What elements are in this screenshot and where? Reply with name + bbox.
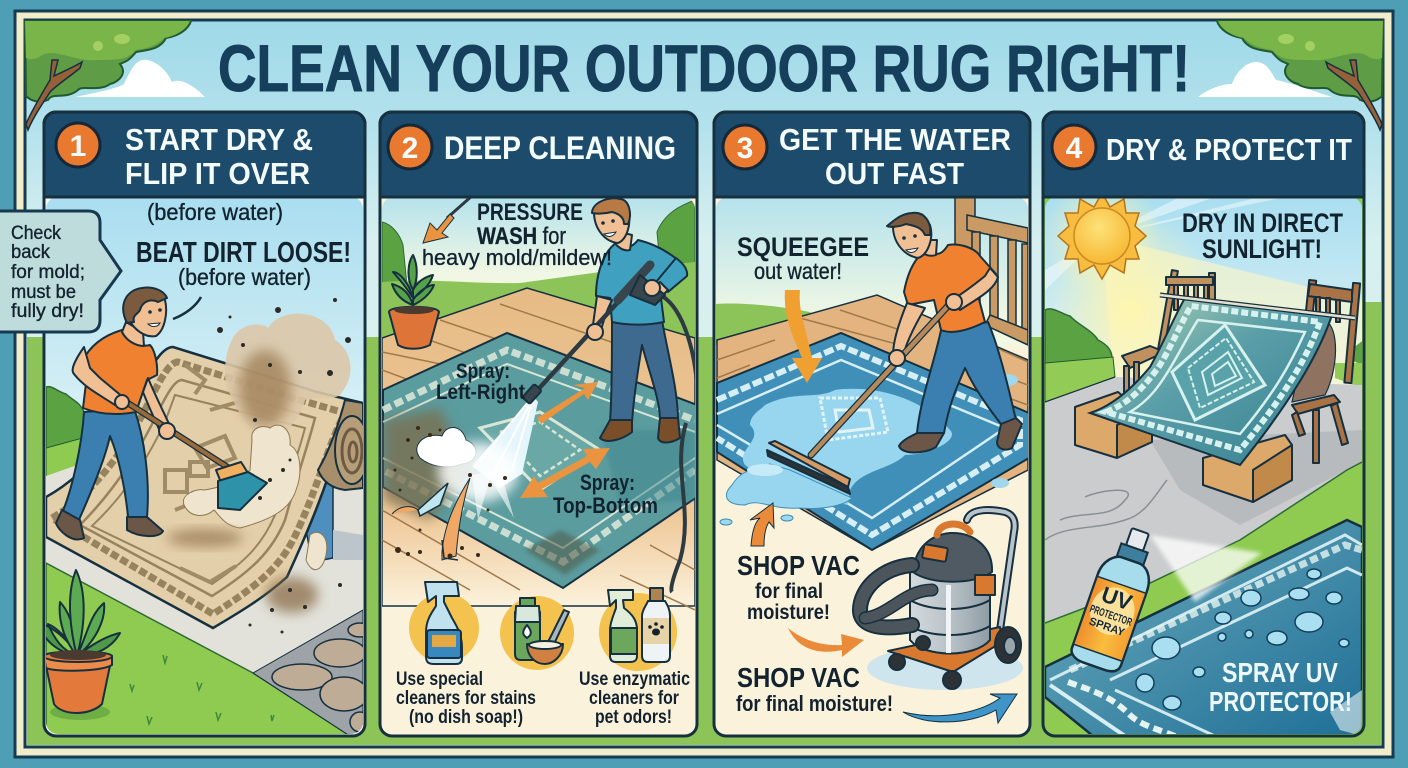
special cleaners caption: Use special — [396, 669, 483, 690]
arrow: down to rug — [785, 290, 822, 383]
draped rug — [1090, 298, 1332, 465]
speech tick — [173, 297, 201, 319]
UV spray bottle: SPRAY — [1087, 615, 1127, 639]
paving stones — [253, 610, 363, 736]
title: CLEAN YOUR OUTDOOR RUG RIGHT! — [218, 31, 1190, 105]
panel 3 header — [714, 112, 1030, 197]
step badge 3 — [723, 125, 767, 169]
pressure washer wand — [522, 265, 665, 404]
panel 1 illustration — [38, 197, 372, 736]
callout: check back for mold: for mold; — [11, 262, 85, 283]
teal rug — [383, 333, 697, 588]
dry in direct sunlight label: DRY IN DIRECT — [1182, 208, 1343, 238]
panel 4 header — [1043, 112, 1364, 197]
UV spray bottle: PROTECTOR — [1088, 603, 1133, 629]
special cleaners caption — [396, 669, 536, 728]
panel 2 header — [380, 112, 697, 197]
enzymatic cleaners caption: cleaners for — [589, 688, 679, 709]
grass tufts — [130, 655, 274, 724]
panel 4: dry and protect it — [1042, 112, 1378, 736]
pressure wash heading — [422, 199, 612, 270]
panel 1 sub caption: (before water) — [178, 264, 311, 290]
spray mist — [1150, 535, 1262, 602]
hose — [662, 296, 695, 385]
spray top-bottom label: Top-Bottom — [553, 493, 658, 518]
panel 1 header: START DRY & — [125, 122, 313, 157]
spray uv protector label — [1209, 657, 1352, 717]
panel 3 header: OUT FAST — [825, 156, 964, 191]
UV spray bottle — [1069, 522, 1165, 675]
callout: check back for mold: Check — [11, 223, 61, 244]
face details man 3 — [902, 234, 918, 252]
callout: check back for mold: must be — [11, 282, 76, 303]
face details man 1 — [148, 308, 162, 327]
dry in direct sunlight label — [1182, 208, 1343, 264]
right cloud — [1198, 62, 1332, 97]
pressure wash heading: WASH for — [477, 223, 566, 250]
panel 1 header — [44, 112, 365, 197]
arrow: up from shop vac label — [750, 503, 774, 546]
bench under roll — [306, 478, 333, 562]
right corner tree — [1217, 21, 1383, 130]
arrow: left-right — [537, 382, 598, 424]
arrow: top-bottom — [520, 448, 610, 498]
bushes — [1045, 309, 1112, 364]
squeegee — [767, 294, 962, 494]
shop vac — [860, 510, 1023, 690]
sparkle — [1330, 690, 1378, 736]
deck railing — [955, 197, 1028, 345]
panel 4 illustration — [1045, 197, 1378, 736]
panel 1: start dry and flip it over — [38, 112, 372, 736]
enzymatic cleaners caption — [579, 669, 690, 728]
shop vac label two — [736, 662, 893, 716]
panel 4 header: DRY & PROTECT IT — [1106, 132, 1352, 167]
rug roll — [318, 400, 363, 490]
water puddle — [743, 389, 952, 505]
panel 1 caption: (before water) — [147, 199, 283, 225]
man 3 — [887, 213, 1022, 452]
squeegee label: SQUEEGEE — [737, 232, 869, 262]
shop vac label one — [737, 550, 860, 624]
squeegee label: out water! — [754, 258, 842, 284]
pressure wash heading: heavy mold/mildew! — [422, 245, 612, 270]
cleaner icon: bottle and bowl — [500, 596, 574, 670]
callout: check back for mold — [0, 211, 121, 332]
enzymatic cleaners caption: Use enzymatic — [579, 669, 690, 690]
cleaner icon: enzymatic bottles — [599, 588, 677, 671]
spray left-right label: Spray: — [456, 360, 510, 383]
special cleaners caption: (no dish soap!) — [409, 707, 523, 728]
spray uv protector label: PROTECTOR! — [1209, 686, 1352, 717]
arrow: blue — [903, 694, 1017, 723]
step badge 2: 2 — [402, 132, 418, 165]
shop vac label two: for final moisture! — [736, 691, 893, 716]
step badge 4: 4 — [1066, 132, 1083, 165]
step badge 2 — [388, 125, 432, 169]
dust clouds — [225, 314, 350, 437]
spray cloud and water jet — [417, 427, 476, 467]
UV spray bottle: UV — [1098, 582, 1136, 615]
potted plant — [389, 255, 439, 349]
enzymatic cleaners caption: pet odors! — [595, 707, 672, 728]
panel 3: get the water out fast — [714, 112, 1030, 736]
step badge 1: 1 — [70, 130, 86, 163]
panel 3 header: GET THE WATER — [779, 122, 1011, 157]
man 2 — [592, 198, 687, 442]
step badge 4 — [1052, 125, 1096, 169]
blue rug — [717, 333, 1029, 550]
shop vac label one: SHOP VAC — [737, 550, 860, 581]
step badge 1 — [56, 123, 100, 167]
spray left-right label — [436, 360, 525, 404]
panel 2: deep cleaning — [380, 112, 697, 736]
cleaner icon: spray bottle — [409, 582, 479, 664]
shop vac label two: SHOP VAC — [737, 662, 860, 693]
shop vac label one: moisture! — [747, 601, 830, 624]
shop vac label one: for final — [755, 580, 823, 603]
special cleaners caption: cleaners for stains — [396, 688, 536, 709]
pressure wash heading: PRESSURE — [477, 199, 583, 226]
arrow: toward vacuum — [788, 628, 864, 657]
tan rug — [46, 347, 363, 628]
callout: check back for mold: back — [11, 242, 50, 263]
squeegee label — [737, 232, 869, 284]
left corner tree — [25, 21, 191, 130]
panel 2 header: DEEP CLEANING — [444, 130, 676, 166]
sun — [1042, 176, 1162, 296]
dry in direct sunlight label: SUNLIGHT! — [1202, 234, 1322, 264]
concrete — [1045, 377, 1362, 623]
man 1 — [56, 287, 267, 539]
face details man 2 — [601, 219, 616, 236]
panel 1 header: FLIP IT OVER — [125, 156, 310, 191]
wooden chairs — [1122, 270, 1360, 396]
potted plant — [38, 570, 120, 720]
arrow: pointing at sprayer — [423, 195, 473, 243]
step badge 3: 3 — [737, 132, 753, 165]
cardboard boxes — [1075, 392, 1292, 502]
callout: check back for mold: fully dry! — [11, 301, 84, 322]
torn corner debris — [418, 483, 448, 516]
blue rug with droplets — [1045, 520, 1362, 736]
panel 3 illustration — [716, 197, 1029, 723]
spray left-right label: Left-Right — [436, 381, 525, 404]
panel 1 heading: BEAT DIRT LOOSE! — [136, 237, 351, 269]
spray top-bottom label — [553, 470, 658, 518]
spray top-bottom label: Spray: — [580, 470, 635, 495]
panel 2 illustration — [382, 195, 697, 671]
left cloud — [75, 60, 205, 97]
spray uv protector label: SPRAY UV — [1222, 657, 1338, 688]
